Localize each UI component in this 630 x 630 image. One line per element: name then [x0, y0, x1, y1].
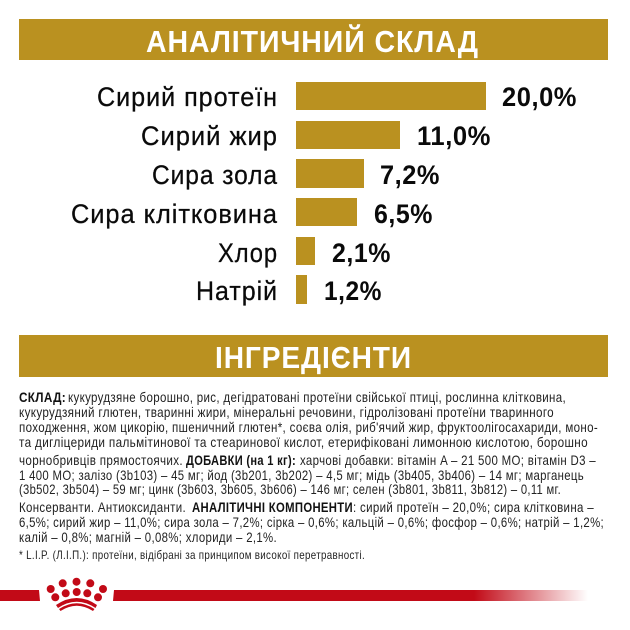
row: crude ash: 7,2%	[380, 160, 440, 190]
row: crude fat: 11,0%	[417, 121, 491, 151]
icon: royal crown logo	[47, 578, 107, 611]
row: crude protein	[97, 82, 577, 112]
red brand line: right segment with fade	[113, 590, 588, 601]
row: crude ash: Сира зола	[152, 160, 278, 190]
row: chlorine: Хлор	[218, 238, 278, 268]
text block: ingredients list: калій – 0,8%; магній – 0,08%; хлориди – 2,1%.	[19, 529, 277, 545]
text block: ingredients list: ДОБАВКИ (на 1 кг):	[186, 452, 296, 468]
row: chlorine: 2,1%	[332, 238, 391, 268]
text block: ingredients list: АНАЛІТИЧНІ КОМПОНЕНТИ	[192, 499, 353, 515]
header banner: analytical composition	[19, 19, 608, 60]
text block: ingredients list: Консерванти. Антиоксиданти.	[19, 499, 186, 515]
bar chart: composition percentages	[71, 82, 577, 306]
footnote: * L.I.P. (Л.І.П.): протеїни, відібрані за принципом високої перетравності.	[19, 548, 365, 562]
row: crude fat	[141, 121, 491, 151]
row: sodium: Натрій	[196, 276, 278, 306]
text block: ingredients list: чорнобривців прямостоячих.	[19, 452, 183, 468]
header banner: ingredients: ІНГРЕДІЄНТИ	[215, 340, 412, 375]
row: crude ash	[152, 159, 440, 190]
row: crude fibre: 6,5%	[374, 199, 433, 229]
row: crude fat: Сирий жир	[141, 121, 278, 151]
row: crude fibre: Сира клітковина	[71, 199, 278, 229]
header banner: ingredients	[19, 335, 608, 377]
row: sodium	[196, 275, 382, 306]
row: crude protein: Сирий протеїн	[97, 82, 278, 112]
row: sodium: 1,2%	[324, 276, 382, 306]
text block: ingredients list: СКЛАД:	[19, 389, 66, 405]
header banner: analytical composition: АНАЛІТИЧНИЙ СКЛАД	[146, 23, 479, 59]
red brand line: left segment	[0, 590, 40, 601]
row: crude protein: 20,0%	[502, 82, 577, 112]
row: chlorine	[218, 237, 391, 268]
row: crude fibre	[71, 198, 433, 229]
text block: ingredients list	[19, 389, 604, 545]
